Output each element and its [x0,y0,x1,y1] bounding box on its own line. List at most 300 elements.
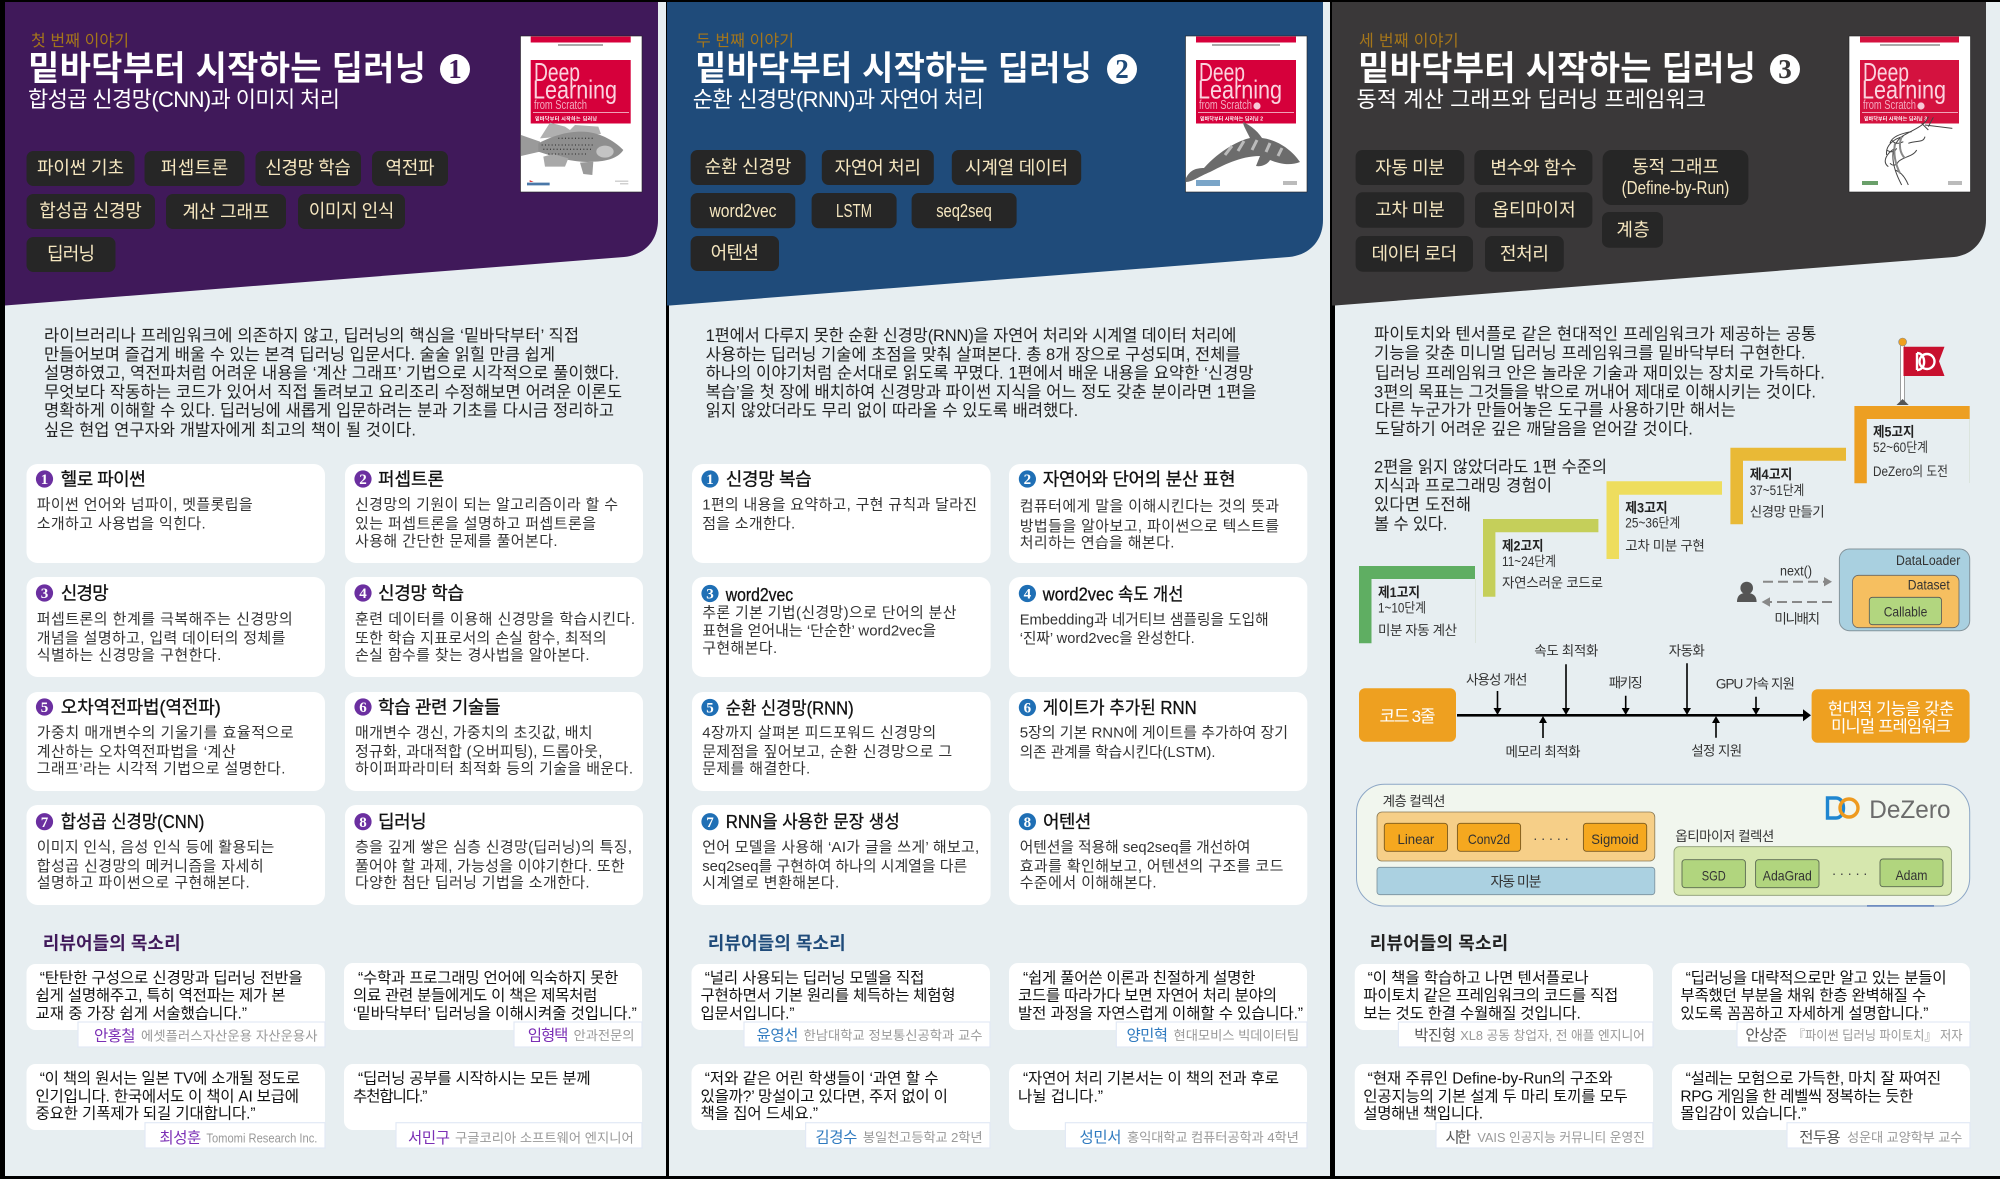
icon: circled number 3 [1770,54,1800,84]
review 2: 양민혁 [1126,1026,1168,1044]
feature labels: GPU 가속 지원 [1716,676,1795,691]
review 3 [1355,1064,1653,1148]
intro text: 라이브러리나 프레임워크에 의존하지 않고, 딥러닝의 핵심을 ‘밑바닥부터’ 직접 [44,326,579,345]
intro text: 읽지 않았더라도 무리 없이 따라올 수 있도록 배려했다. [706,401,1078,420]
chapter card 4: 4 [1024,587,1032,603]
icon: circled number 2: 2 [1115,54,1129,84]
chapter card 1: 파이썬 언어와 넘파이, 멧플롯립을 [37,496,253,513]
panel: book 2 [667,2,1330,1176]
text: prerequisite note: 볼 수 있다. [1374,514,1448,533]
review 3: 시한 [1445,1128,1471,1146]
review 3: 봉일천고등학교 2학년 [863,1130,983,1145]
book cover 3 [1849,36,1970,192]
review 1 [1355,964,1653,1047]
chapter card 2: 자연어와 단어의 분산 표현 [1043,470,1236,490]
review 1: 파이토치 같은 프레임워크의 코드를 직접 [1363,987,1618,1005]
optimizer collection box [1674,847,1951,895]
topic tags: LSTM [836,201,872,221]
step 3: 고차 미분 구현 [1625,539,1705,554]
chapter card 6: 6 [1024,701,1032,717]
chapter card 5: 문제를 해결한다. [702,760,810,777]
chapter card 2: 2 [359,472,367,488]
optimizer collection box: Adam [1896,867,1928,883]
chapter card 8: 어텐션을 적용해 seq2seq를 개선하여 [1020,839,1250,856]
feature labels: 사용성 개선 [1466,672,1527,687]
review 4: 추천합니다.” [353,1087,427,1105]
eyebrow: 첫 번째 이야기 [31,32,129,50]
box: DataLoader [1839,549,1970,631]
chapter card 4: 손실 함수를 찾는 경사법을 알아본다. [355,647,590,664]
chapter card 5: 그래프’라는 시각적 기법으로 설명한다. [37,760,285,777]
topic tags: 어텐션 [711,243,759,263]
header background: blue [667,2,1323,306]
review 1: 안홍철 [94,1027,136,1045]
chapter card 3: 3 [706,587,714,603]
chapter card 7 [26,805,325,905]
review 3: 김경수 [815,1128,857,1146]
chapter card 2 [345,464,643,563]
review 2: 『파이썬 딥러닝 파이토치』 저자 [1793,1028,1962,1043]
chapter card 3 [692,577,991,677]
book cover 1: from Scratch [534,97,587,112]
review 3: 인기입니다. 한국에서도 이 책이 AI 보급에 [36,1087,299,1105]
layer collection box [1377,812,1655,861]
chapter card 4: Embedding과 네거티브 샘플링을 도입해 [1020,611,1269,628]
label: layer collection: 계층 컬렉션 [1383,794,1445,809]
box: minimal framework: 현대적 기능을 갖춘 [1828,699,1954,718]
step 3: 25~36단계 [1625,516,1680,531]
chapter card 2: 방법들을 알아보고, 파이썬으로 텍스트를 [1020,518,1279,535]
chapter card 8: 효과를 확인해보고, 어텐션의 구조를 코드 [1020,858,1284,875]
review 2: 발전 과정을 자연스럽게 이해할 수 있습니다.” [1018,1004,1303,1022]
feature labels: 설정 지원 [1691,744,1742,759]
review 3 [692,1064,990,1148]
feature labels: 속도 최적화 [1534,644,1598,659]
chapter card 7: 설명하고 파이썬으로 구현해본다. [37,874,250,892]
chapter card 5: 5 [706,701,714,717]
chapter card 4: 훈련 데이터를 이용해 신경망을 학습시킨다. [355,611,635,628]
chapter card 4: word2vec 속도 개선 [1042,584,1183,604]
chapter card 6: 정규화, 과대적합 (오버피팅), 드롭아웃, [355,743,602,760]
intro text: 싶은 현업 연구자와 개발자에게 최고의 책이 될 것이다. [44,420,416,439]
chapter card 6: 6 [359,700,367,716]
chapter card 7: 언어 모델을 사용해 ‘AI가 글을 쓰게’ 해보고, [702,839,979,856]
chapter card 3: 개념을 설명하고, 입력 데이터의 정체를 [37,630,286,647]
chapter card 1: 1편의 내용을 요약하고, 구현 규칙과 달라진 [702,496,977,513]
layer collection box: Sigmoid [1591,831,1639,847]
review 3: Tomomi Research Inc. [206,1130,317,1146]
chapter card 3: 구현해본다. [702,640,777,657]
chapter card 2: 퍼셉트론 [378,470,444,490]
book cover 1: Learning [533,74,617,104]
title: 밑바닥부터 시작하는 딥러닝 [695,50,1092,88]
reviews heading: 리뷰어들의 목소리 [1370,934,1508,954]
optimizer collection box: AdaGrad [1763,868,1812,884]
step 2 [1483,519,1603,597]
chapter card 1: 소개하고 사용법을 익힌다. [37,515,206,532]
book cover 3: Learning [1862,74,1946,104]
intro text: 만들어보며 즐겁게 배울 수 있는 본격 딥러닝 입문서다. 술술 읽힐 만큼 쉽게 [44,345,555,364]
layer collection box: ····· [1533,830,1569,846]
box: minimal framework: 미니멀 프레임워크 [1831,717,1951,736]
chapter card 8: 수준에서 이해해본다. [1020,874,1156,892]
review 2: ‘밑바닥부터’ 딥러닝을 이해시켜줄 것입니다.” [353,1004,637,1022]
intro text: 복습’을 첫 장에 배치하여 신경망과 파이썬 지식을 어느 정도 갖춘 분이라면 1편을 [706,383,1256,402]
autodiff bar: 자동 미분 [1490,873,1542,889]
topic tags: 퍼셉트론 [161,158,228,178]
step 1: 제1고지 [1378,585,1420,600]
review 3: 설명해낸 책입니다. [1363,1104,1483,1122]
book cover 1 [520,36,642,192]
text: prerequisite note: 지식과 프로그래밍 경험이 [1374,476,1552,495]
chapter card 8: 다양한 첨단 딥러닝 기법을 소개한다. [355,874,590,892]
arrow: main line [1457,709,1811,721]
chapter card 7: RNN을 사용한 문장 생성 [726,812,900,832]
chapter card 4: 신경망 학습 [378,584,464,604]
review 2: 안상준 [1745,1026,1787,1044]
optimizer collection box: ····· [1832,865,1868,881]
topic tags: 합성곱 신경망 [39,201,142,221]
chapter card 4: ‘진짜’ word2vec을 완성한다. [1020,630,1195,647]
topic tags: 전처리 [1500,244,1549,264]
chapter card 5: 순환 신경망(RNN) [726,698,854,718]
box: three lines of code: 코드 3줄 [1380,707,1436,726]
review 1: 박진형 [1414,1026,1456,1044]
topic tags: 계층 [1616,220,1650,240]
chapter card 5: 문제점을 짚어보고, 순환 신경망으로 그 [702,743,952,760]
review 1: “널리 사용되는 딥러닝 모델을 직접 [705,969,924,987]
eyebrow: 세 번째 이야기 [1359,32,1459,50]
chapter card 8: 8 [1024,815,1031,831]
chapter card 6: 학습 관련 기술들 [378,698,501,718]
topic tags: 신경망 학습 [265,158,351,178]
intro text: 1편에서 다루지 못한 순환 신경망(RNN)을 자연어 처리와 시계열 데이터 처리에 [706,326,1236,345]
review 3: 중요한 기폭제가 되길 기대합니다.” [36,1104,256,1122]
chapter card 7: 이미지 인식, 음성 인식 등에 활용되는 [37,839,274,856]
subtitle: 합성곱 신경망(CNN)과 이미지 처리 [28,87,340,112]
subtitle: 순환 신경망(RNN)과 자연어 처리 [693,87,984,112]
review 2 [1009,963,1307,1047]
subtitle: 동적 계산 그래프와 딥러닝 프레임워크 [1356,87,1706,112]
topic tags [1356,150,1748,272]
chapter card 5 [692,692,991,791]
chapter card 4 [1009,577,1307,677]
chapter card 2 [1009,464,1307,563]
chapter card 8: 어텐션 [1043,812,1091,832]
step 4: 신경망 만들기 [1750,505,1825,520]
intro text: 사용하는 딥러닝 기술에 초점을 맞춰 살펴본다. 총 8개 장으로 구성되며, 전체를 [706,345,1241,364]
review 4: “자연어 처리 기본서는 이 책의 전과 후로 [1023,1069,1279,1087]
chapter card 2: 사용해 간단한 문제를 풀어본다. [355,533,558,550]
chapter card 6 [345,692,643,791]
chapter card 6: 게이트가 추가된 RNN [1043,698,1197,718]
chapter card 4 [345,577,643,677]
topic tags: word2vec [709,201,776,221]
review 4: 홍익대학교 컴퓨터공학과 4학년 [1127,1130,1299,1145]
review 2 [344,963,642,1047]
step 1: 미분 자동 계산 [1378,623,1457,638]
intro text: 설명하였고, 역전파처럼 어려운 내용을 ‘계산 그래프’ 기법으로 시각적으로 풀이했다. [44,364,619,383]
topic tags: 역전파 [386,158,435,178]
DeZero logo: DeZero [1869,796,1950,824]
review 1 [26,964,325,1047]
box: three lines of code [1359,688,1456,742]
chapter card 7: 합성곱 신경망(CNN) [61,812,204,832]
review 1: 구현하면서 기본 원리를 체득하는 체험형 [700,987,956,1005]
book cover 2: 밑바닥부터 시작하는 딥러닝 2 [1200,116,1263,122]
review 4: “딥러닝 공부를 시작하시는 모든 분께 [358,1069,591,1087]
chapter card 7: seq2seq를 구현하여 하나의 시계열을 다른 [702,858,967,875]
step 2: 자연스러운 코드로 [1502,575,1603,590]
step 2: 11~24단계 [1502,554,1556,569]
topic tags: 고차 미분 [1375,200,1445,220]
label: optimizer collection: 옵티마이저 컬렉션 [1675,829,1774,844]
book cover 1: 밑바닥부터 시작하는 딥러닝 [535,116,597,122]
step 5: 제5고지 [1873,425,1914,440]
arrow: next [1763,577,1832,586]
icon: circled number 1 [440,54,470,84]
review 3 [26,1064,325,1148]
review 1: XL8 공동 창업자, 전 애플 엔지니어 [1460,1028,1645,1043]
review 3: 최성훈 [159,1129,201,1147]
topic tags: 자동 미분 [1375,158,1445,178]
chapter card 5 [26,692,325,791]
feature labels: 자동화 [1669,644,1705,659]
review 2: 부족했던 부분을 채워 한층 완벽해질 수 [1680,987,1926,1005]
chapter card 6 [1009,692,1307,791]
chapter card 4: 또한 학습 지표로서의 손실 함수, 최적의 [355,630,607,647]
chapter card 1: 점을 소개한다. [702,515,795,532]
topic tags: 이미지 인식 [309,201,394,221]
box: Callable: Callable [1884,603,1927,619]
topic tags [26,151,448,272]
box: minimal framework [1812,689,1970,743]
book cover 2: Learning [1198,74,1282,104]
review 2: 코드를 따라가다 보면 자연어 처리 분야의 [1018,987,1277,1005]
header background: charcoal [1332,2,1986,306]
chapter card 5: 4장까지 살펴본 피드포워드 신경망의 [702,724,936,741]
DeZero logo [1828,796,1950,824]
feature labels: 메모리 최적화 [1506,745,1580,760]
chapter card 3: 식별하는 신경망을 구현한다. [37,647,221,664]
review 3: VAIS 인공지능 커뮤니티 운영진 [1477,1130,1645,1145]
topic tags: 파이썬 기초 [37,158,124,178]
book cover 1: Deep [534,57,580,87]
chapter card 1: 헬로 파이썬 [61,470,146,490]
chapter card 8 [1009,805,1307,905]
chapter card 3: 퍼셉트론의 한계를 극복해주는 신경망의 [37,611,293,628]
chapter card 6: 5장의 기본 RNN에 게이트를 추가하여 장기 [1020,724,1288,741]
chapter card 2: 컴퓨터에게 말을 이해시킨다는 것의 뜻과 [1020,498,1279,515]
icon: circled number 3: 3 [1778,54,1792,84]
chapter card 5: 5 [41,700,48,716]
review 1: 한남대학교 정보통신공학과 교수 [804,1028,982,1043]
review 3: “이 책의 원서는 일본 TV에 소개될 정도로 [40,1069,300,1087]
layer collection box: Linear [1398,831,1435,847]
review 1: 에셋플러스자산운용 자산운용사 [141,1028,318,1044]
autodiff bar [1377,867,1655,895]
chapter card 8 [345,805,643,905]
feature arrows [1494,663,1760,738]
reviews heading: 리뷰어들의 목소리 [43,934,181,954]
chapter card 1 [692,464,991,563]
chapter card 4: 4 [359,586,367,602]
step 1: 1~10단계 [1378,600,1426,616]
chapter card 7: 7 [706,815,714,831]
chapter card 7: 시계열로 변환해본다. [702,874,839,892]
review 4: 전두용 [1799,1128,1841,1146]
box: DataLoader: DataLoader [1896,553,1961,568]
review 3: 있을까?’ 망설이고 있다면, 주저 없이 이 [700,1087,948,1105]
intro text: 하나의 이야기처럼 순서대로 읽도록 꾸몄다. 1편에서 배운 내용을 요약한 ‘신경망 [706,364,1254,383]
intro text: 딥러닝 프레임워크 안은 놀라운 기술과 재미있는 장치로 가득하다. [1375,363,1825,382]
review 2: “수학과 프로그래밍 언어에 익숙하지 못한 [358,969,618,987]
topic tags: 옵티마이저 [1492,200,1576,220]
title: 밑바닥부터 시작하는 딥러닝 [1358,50,1756,88]
DeZero architecture diagram [1356,784,1970,907]
review 1: 보는 것도 한결 수월해질 것입니다. [1363,1004,1581,1022]
chapter card 3: word2vec [725,585,793,605]
DataLoader diagram [1737,549,1970,631]
review 1: 윤영선 [756,1026,798,1044]
review 3: 인공지능의 기본 설계 두 마리 토끼를 모두 [1363,1087,1628,1105]
review 4: RPG 게임을 한 레벨씩 정복하는 듯한 [1680,1087,1913,1105]
intro text: 다른 누군가가 만들어놓은 도구를 사용하기만 해서는 [1375,400,1736,419]
intro text: 명확하게 이해할 수 있다. 딥러닝에 새롭게 입문하려는 분과 기초를 다시금 정리하고 [44,401,614,420]
chapter card 3: 3 [41,586,48,602]
illustration: shark [1186,122,1300,186]
review 4 [1672,1064,1970,1148]
chapter card 8: 딥러닝 [378,812,427,832]
intro text: 무엇보다 작동하는 코드가 있어서 직접 돌려보고 요리조리 수정해보면 어려운 이론도 [44,383,622,402]
label: mini-batch: 미니배치 [1774,611,1820,626]
chapter card 8: 층을 깊게 쌓은 심층 신경망(딥러닝)의 특징, [355,839,632,856]
step 4: 37~51단계 [1750,483,1804,498]
review 2 [1672,963,1970,1047]
topic tags: seq2seq [936,201,992,221]
chapter card 8: 8 [359,815,367,831]
review 4: 성운대 교양학부 교수 [1847,1130,1962,1145]
book cover 3: 밑바닥부터 시작하는 딥러닝 3 [1864,116,1927,122]
topic tags: 데이터 로더 [1372,244,1457,264]
icon: person [1737,582,1757,602]
topic tags: 계산 그래프 [182,202,270,222]
intro text: 3편의 목표는 그것들을 밖으로 꺼내어 제대로 이해시키는 것이다. [1374,383,1816,402]
topic tags: 딥러닝 [47,244,95,264]
review 1: 교재 중 가장 쉽게 서술했습니다.” [36,1004,247,1022]
arrow: mini-batch [1762,597,1832,607]
chapter card 5: 계산하는 오차역전파법을 ‘계산 [37,743,236,760]
chapter card 2: 있는 퍼셉트론을 설명하고 퍼셉트론을 [355,515,596,532]
book cover 2 [1186,36,1307,192]
review 4: 나뉠 겁니다.” [1018,1087,1103,1105]
chapter card 7: 합성곱 신경망의 메커니즘을 자세히 [37,858,264,875]
book cover 3: from Scratch [1863,97,1916,112]
chapter card 6: 매개변수 갱신, 가중치의 초깃값, 배치 [355,724,593,741]
chapter card 2: 처리하는 연습을 해본다. [1020,535,1174,552]
feature labels: 패키징 [1609,676,1643,691]
chapter card 7 [692,805,991,905]
icon: circled number 2 [1107,54,1137,84]
review 2: 있도록 꼼꼼하고 자세하게 설명합니다.” [1680,1004,1928,1022]
optimizer collection box: SGD [1702,868,1726,884]
feature labels [1466,644,1795,760]
panel: book 3 [1332,2,2000,1176]
chapter card 1: 신경망 복습 [726,470,812,490]
review 1: “탄탄한 구성으로 신경망과 딥러닝 전반을 [40,969,303,987]
step 3 [1606,481,1722,559]
step 4: 제4고지 [1750,467,1792,482]
chapter card 2: 2 [1024,472,1031,488]
review 4 [1009,1064,1307,1148]
step 5 [1854,406,1970,483]
step 2: 제2고지 [1502,538,1544,554]
review 2: 안과전문의 [574,1028,634,1043]
review 2: 의료 관련 분들에게도 이 책은 제목처럼 [353,987,597,1005]
review 4: “설레는 모험으로 가득한, 마치 잘 짜여진 [1686,1069,1941,1087]
icon: circled number 1: 1 [448,54,462,84]
review 3: “현재 주류인 Define-by-Run의 구조와 [1368,1069,1613,1087]
step 5: DeZero의 도전 [1873,464,1948,479]
review 3: 책을 집어 드세요.” [700,1104,818,1122]
topic tags: 자연어 처리 [835,158,921,178]
chapter card 3: 표현을 얻어내는 ‘단순한’ word2vec을 [702,622,936,639]
panel: book 1 [5,2,666,1176]
icon: flag [1896,338,1944,405]
intro text [1374,324,1825,438]
text: prerequisite note: 2편을 읽지 않았더라도 1편 수준의 [1374,458,1607,477]
layer collection box: Conv2d [1468,831,1510,847]
intro text [706,326,1256,420]
book cover 2: Deep [1199,57,1245,87]
review 1: 입문서입니다.” [700,1004,794,1022]
chapter card 7: 7 [41,815,49,831]
label: next(): next() [1780,564,1812,578]
title: 밑바닥부터 시작하는 딥러닝 [28,50,426,88]
intro text: 파이토치와 텐서플로 같은 현대적인 프레임워크가 제공하는 공통 [1374,324,1816,343]
topic tags: 동적 그래프 [1632,157,1719,177]
step 4 [1730,448,1846,524]
review 2: “쉽게 풀어쓴 이론과 친절하게 설명한 [1023,969,1256,987]
book cover 3: Deep [1863,57,1909,87]
review 4: 몰입감이 있습니다.” [1680,1104,1806,1122]
chapter card 3: 추론 기본 기법(신경망)으로 단어의 분산 [702,605,957,622]
eyebrow: 두 번째 이야기 [696,32,794,50]
reviews heading: 리뷰어들의 목소리 [708,934,846,954]
review 4: 성민서 [1080,1128,1122,1146]
chapter card 8: 풀어야 할 과제, 가능성을 이야기한다. 또한 [355,858,625,875]
review 4: 서민구 [408,1129,450,1147]
intro text [44,326,622,439]
staircase diagram [1359,338,1970,643]
review 1: “이 책을 학습하고 나면 텐서플로나 [1368,969,1589,987]
chapter card 6: 하이퍼파라미터 최적화 등의 기술을 배운다. [355,760,633,777]
step 1 [1359,566,1476,643]
chapter card 1: 1 [41,472,48,488]
review 1 [692,964,990,1047]
illustration: sea dragon [1885,117,1952,185]
review 3: “저와 같은 어린 학생들이 ‘과연 할 수 [705,1069,938,1087]
topic tags: (Define-by-Run) [1622,178,1729,198]
illustration: fish [521,123,628,185]
chapter card 1: 1 [706,472,714,488]
topic tags [691,150,1081,271]
chapter card 5: 오차역전파법(역전파) [61,698,221,718]
step 5: 52~60단계 [1873,440,1928,455]
review 2: “딥러닝을 대략적으로만 알고 있는 분들이 [1686,969,1947,987]
header background: purple [5,2,658,306]
topic tags: 시계열 데이터 [965,158,1068,178]
